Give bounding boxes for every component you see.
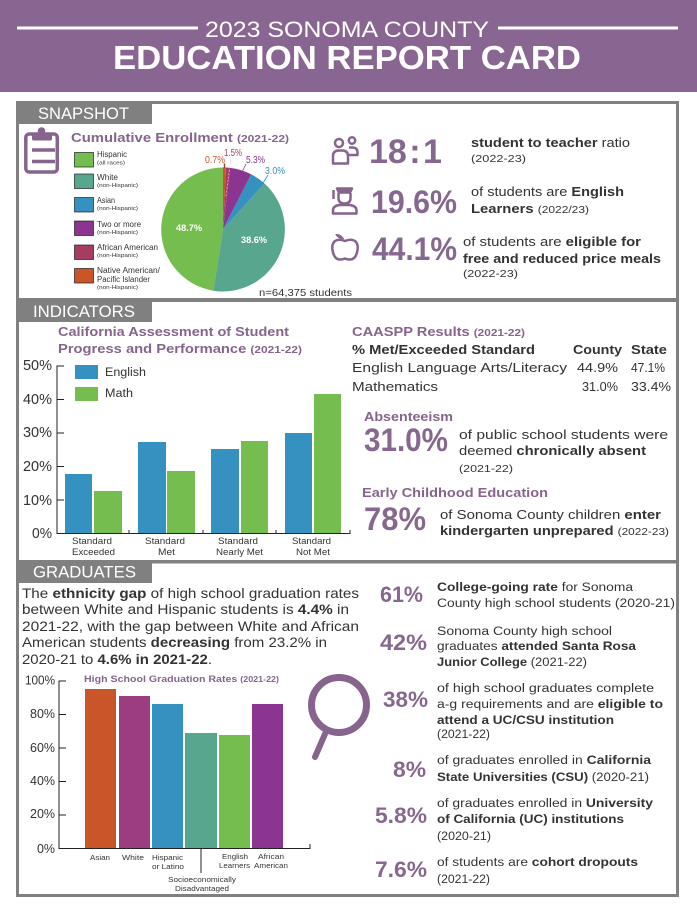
pie chart: 3.0% <box>265 166 285 177</box>
stat: english learners: of students are English <box>471 184 624 199</box>
panel: graduates: GRADUATES <box>33 562 136 582</box>
table: CAASPP results: English Language Arts/Literacy <box>352 360 568 375</box>
pie legend <box>74 150 161 291</box>
stat: free and reduced meals: (2022-23) <box>463 268 518 280</box>
stat: CSU enrollment: 8% <box>393 757 426 782</box>
icon: apple <box>332 234 358 260</box>
pie legend: (non-Hispanic) <box>97 253 138 259</box>
bar chart: graduation rates: 20% <box>30 806 55 821</box>
stat: Santa Rosa Junior College: 42% <box>380 630 427 655</box>
stat: UC/CSU eligibility: attend a UC/CSU institution <box>437 715 614 727</box>
stat: early childhood education: Early Childhood Education <box>362 485 548 500</box>
heading: CAASPP chart: Progress and Performance (2021-22) <box>58 341 302 356</box>
bar chart: graduation rates: Learners <box>219 861 250 870</box>
pie legend: (non-Hispanic) <box>97 183 138 189</box>
stat: student to teacher ratio: (2022-23) <box>471 153 526 165</box>
bar chart: graduation rates: English <box>222 852 248 861</box>
stat: english learners: 19.6% <box>371 184 457 220</box>
pie legend: African American <box>97 243 158 252</box>
title banner: EDUCATION REPORT CARD <box>113 39 581 76</box>
stat: UC enrollment: 5.8% <box>375 803 427 828</box>
bar chart: graduation rates: Asian <box>90 853 110 862</box>
stat: CSU enrollment: State Universities (CSU) (2020-21) <box>437 772 649 784</box>
text block: ethnicity gap <box>22 585 359 667</box>
pie legend: (non-Hispanic) <box>97 206 138 212</box>
bar chart: graduation rates: 0% <box>37 841 55 856</box>
text block: ethnicity gap: between White and Hispanic students is 4.4% in <box>22 601 349 617</box>
stat: student to teacher ratio: 18 : 1 <box>369 133 442 171</box>
pie legend: (all races) <box>97 160 125 166</box>
stat: Santa Rosa Junior College: Junior College (2021-22) <box>437 657 587 669</box>
pie chart: 1.5% <box>224 148 242 159</box>
stat: UC/CSU eligibility <box>383 683 663 741</box>
pie chart: 48.7% <box>176 223 203 234</box>
sample size note: n=64,375 students <box>259 287 352 299</box>
stat: college-going rate <box>380 582 675 610</box>
table: CAASPP results: State <box>631 342 667 357</box>
stat: college-going rate: County high school students (2020-21) <box>437 598 675 610</box>
stat: Santa Rosa Junior College: Sonoma County high school <box>437 626 612 638</box>
table: CAASPP results: 33.4% <box>631 379 671 394</box>
text block: ethnicity gap: 2021-22, with the gap between White and African <box>22 618 359 634</box>
bar chart: CAASPP: Not Met <box>296 547 331 557</box>
table: CAASPP results: CAASPP Results (2021-22) <box>352 324 525 339</box>
bar chart: graduation rates: or Latino <box>152 862 184 871</box>
title banner <box>0 0 697 92</box>
stat: early childhood education: of Sonoma County children enter <box>440 507 661 522</box>
heading: cumulative enrollment: Cumulative Enrollment (2021-22) <box>71 130 289 145</box>
text block: ethnicity gap: 2020-21 to 4.6% in 2021-22 . <box>22 651 212 667</box>
bar chart: CAASPP: 50% <box>23 357 52 374</box>
bar chart: graduation rates: High School Graduation Rates (2021-22) <box>84 674 279 685</box>
stat: UC/CSU eligibility: of high school graduates complete <box>437 683 654 695</box>
pie chart: 5.3% <box>246 155 265 166</box>
stat: early childhood education: 78% <box>364 501 426 537</box>
stat: absenteeism: of public school students were <box>459 427 668 442</box>
bar chart: graduation rates: 80% <box>30 706 55 721</box>
stat: cohort dropouts: (2021-22) <box>437 874 490 886</box>
bar chart: CAASPP <box>23 357 350 557</box>
bar chart: graduation rates: 60% <box>30 740 55 755</box>
bar chart: CAASPP: 20% <box>23 458 52 475</box>
text block: ethnicity gap: American students decreasing from 23.2% in <box>22 634 327 650</box>
icon: people <box>333 137 358 164</box>
bar chart: CAASPP: English <box>105 367 146 379</box>
heading: CAASPP chart: California Assessment of Student <box>58 324 290 339</box>
stat: UC enrollment <box>375 798 654 843</box>
bar chart: CAASPP: Exceeded <box>72 547 115 557</box>
stat: free and reduced meals: of students are eligible for <box>463 234 641 249</box>
title banner: 2023 SONOMA COUNTY <box>205 17 489 42</box>
bar chart: graduation rates: American <box>254 861 288 870</box>
stat: free and reduced meals <box>372 231 661 280</box>
bar chart: CAASPP: 30% <box>23 424 52 441</box>
stat: absenteeism <box>364 409 668 475</box>
text block: ethnicity gap: The ethnicity gap of high school graduation rates <box>22 585 359 601</box>
stat: cohort dropouts <box>375 857 638 886</box>
pie legend: White <box>97 173 119 182</box>
pie legend: (non-Hispanic) <box>97 230 138 236</box>
bar chart: CAASPP: Standard <box>145 536 185 546</box>
pie chart: 0.7% <box>205 155 225 166</box>
stat: UC enrollment: of graduates enrolled in University <box>437 798 654 810</box>
table: CAASPP results: 47.1% <box>631 360 665 375</box>
stat: early childhood education: kindergarten unprepared (2022-23) <box>440 523 669 538</box>
bar chart: CAASPP: Standard <box>218 536 258 546</box>
bar chart: graduation rates: White <box>122 853 144 862</box>
bar chart: graduation rates: African <box>258 852 284 861</box>
bar chart: CAASPP: 40% <box>23 391 52 408</box>
bar chart: graduation rates: 40% <box>30 773 55 788</box>
bar chart: CAASPP: 0% <box>32 525 52 542</box>
stat: cohort dropouts: 7.6% <box>375 857 427 882</box>
stat: absenteeism: 31.0% <box>364 422 448 458</box>
stat: UC enrollment: (2020-21) <box>437 831 491 843</box>
stat: CSU enrollment <box>393 755 652 784</box>
panel: snapshot <box>16 101 678 300</box>
pie legend: (non-Hispanic) <box>97 285 138 291</box>
table: CAASPP results: County <box>573 342 623 357</box>
bar chart: CAASPP: 10% <box>23 492 52 509</box>
stat: student to teacher ratio: student to teacher ratio <box>471 135 630 150</box>
stat: free and reduced meals: free and reduced price meals <box>463 251 661 266</box>
pie legend: Asian <box>97 196 115 205</box>
table: CAASPP results <box>352 324 671 394</box>
stat: college-going rate: 61% <box>380 582 423 607</box>
bar chart: graduation rates <box>25 672 310 893</box>
pie legend: Two or more <box>97 220 142 229</box>
stat: absenteeism: deemed chronically absent <box>459 443 647 458</box>
panel: graduates <box>16 560 678 896</box>
table: CAASPP results: 31.0% <box>582 379 618 394</box>
bar chart: graduation rates: 100% <box>25 672 55 688</box>
pie legend: Native American/ <box>97 266 161 275</box>
stat: UC/CSU eligibility: (2021-22) <box>437 729 490 741</box>
stat: early childhood education <box>362 485 669 538</box>
stat: Santa Rosa Junior College: graduates attended Santa Rosa <box>437 641 637 653</box>
stat: absenteeism: (2021-22) <box>459 463 513 475</box>
panel: indicators: INDICATORS <box>33 302 135 321</box>
stat: english learners: Learners (2022/23) <box>471 201 589 216</box>
pie legend: Hispanic <box>97 150 127 159</box>
stat: free and reduced meals: 44.1% <box>372 231 457 267</box>
stat: Santa Rosa Junior College <box>380 626 637 669</box>
panel: indicators <box>16 299 678 562</box>
stat: CSU enrollment: of graduates enrolled in California <box>437 755 652 767</box>
stat: english learners <box>371 184 624 220</box>
bar chart: graduation rates: Socioeconomically <box>168 875 236 884</box>
stat: student to teacher ratio <box>369 133 630 171</box>
bar chart: CAASPP: Standard <box>72 536 112 546</box>
stat: UC/CSU eligibility: a-g requirements and are eligible to <box>437 699 663 711</box>
bar chart: CAASPP: Met <box>158 547 176 557</box>
stat: college-going rate: College-going rate for Sonoma <box>437 582 634 594</box>
stat: UC enrollment: of California (UC) institutions <box>437 814 624 826</box>
table: CAASPP results: % Met/Exceeded Standard <box>352 342 535 357</box>
heading: CAASPP chart <box>58 324 302 356</box>
bar chart: graduation rates: Disadvantaged <box>175 884 229 893</box>
pie chart <box>161 148 285 291</box>
stat: UC/CSU eligibility: 38% <box>383 687 428 712</box>
bar chart: graduation rates: Hispanic <box>152 853 183 862</box>
pie legend: Pacific Islander <box>97 275 150 284</box>
stat: absenteeism: Absenteeism <box>364 409 453 424</box>
bar chart: CAASPP: Math <box>105 388 133 400</box>
bar chart: CAASPP: Nearly Met <box>216 547 264 557</box>
table: CAASPP results: 44.9% <box>577 360 618 375</box>
icon: clipboard <box>26 127 57 172</box>
pie chart: 38.6% <box>241 235 268 246</box>
icon: magnifying glass <box>312 678 366 757</box>
stat: cohort dropouts: of students are cohort dropouts <box>437 857 638 869</box>
icon: graduate <box>333 188 356 214</box>
panel: snapshot: SNAPSHOT <box>38 104 129 123</box>
bar chart: CAASPP: Standard <box>292 536 331 546</box>
table: CAASPP results: Mathematics <box>352 379 439 394</box>
